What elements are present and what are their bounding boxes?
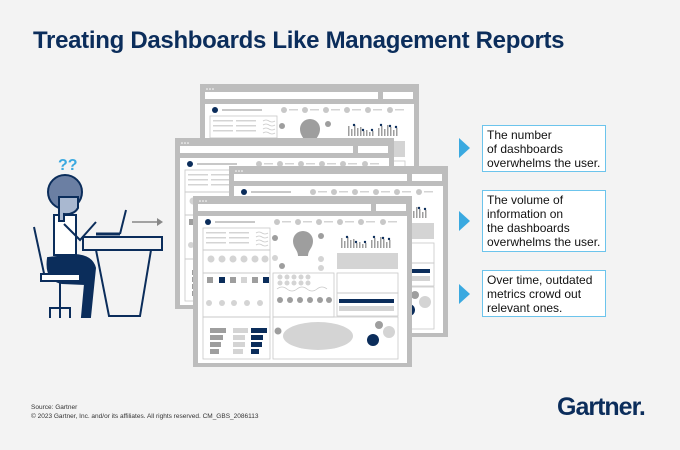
text: metrics crowd out	[487, 287, 581, 301]
arrow	[132, 218, 163, 226]
footer source	[31, 404, 258, 420]
callout 1	[459, 125, 606, 172]
window: front	[193, 196, 412, 367]
footer source: Source: Gartner	[31, 404, 77, 411]
text: The number	[487, 128, 552, 142]
icon: question marks: ??	[58, 157, 78, 174]
text: overwhelms the user.	[487, 235, 600, 249]
callout 2	[459, 190, 606, 252]
logo: Gartner.	[557, 393, 645, 421]
text: of dashboards	[487, 142, 563, 156]
illustration: person at desk	[33, 157, 163, 318]
window: left	[175, 138, 394, 309]
window: back	[200, 84, 419, 255]
text: overwhelms the user.	[487, 156, 600, 170]
text: information on	[487, 207, 563, 221]
footer source: © 2023 Gartner, Inc. and/or its affiliates. All rights reserved. CM_GBS_2086113	[31, 413, 258, 420]
text: relevant ones.	[487, 301, 562, 315]
text: the dashboards	[487, 221, 570, 235]
text: Over time, outdated	[487, 273, 592, 287]
text: The volume of	[487, 193, 563, 207]
window: middle	[229, 166, 448, 337]
callout 3	[459, 270, 606, 317]
title: Treating Dashboards Like Management Reports	[33, 27, 564, 54]
